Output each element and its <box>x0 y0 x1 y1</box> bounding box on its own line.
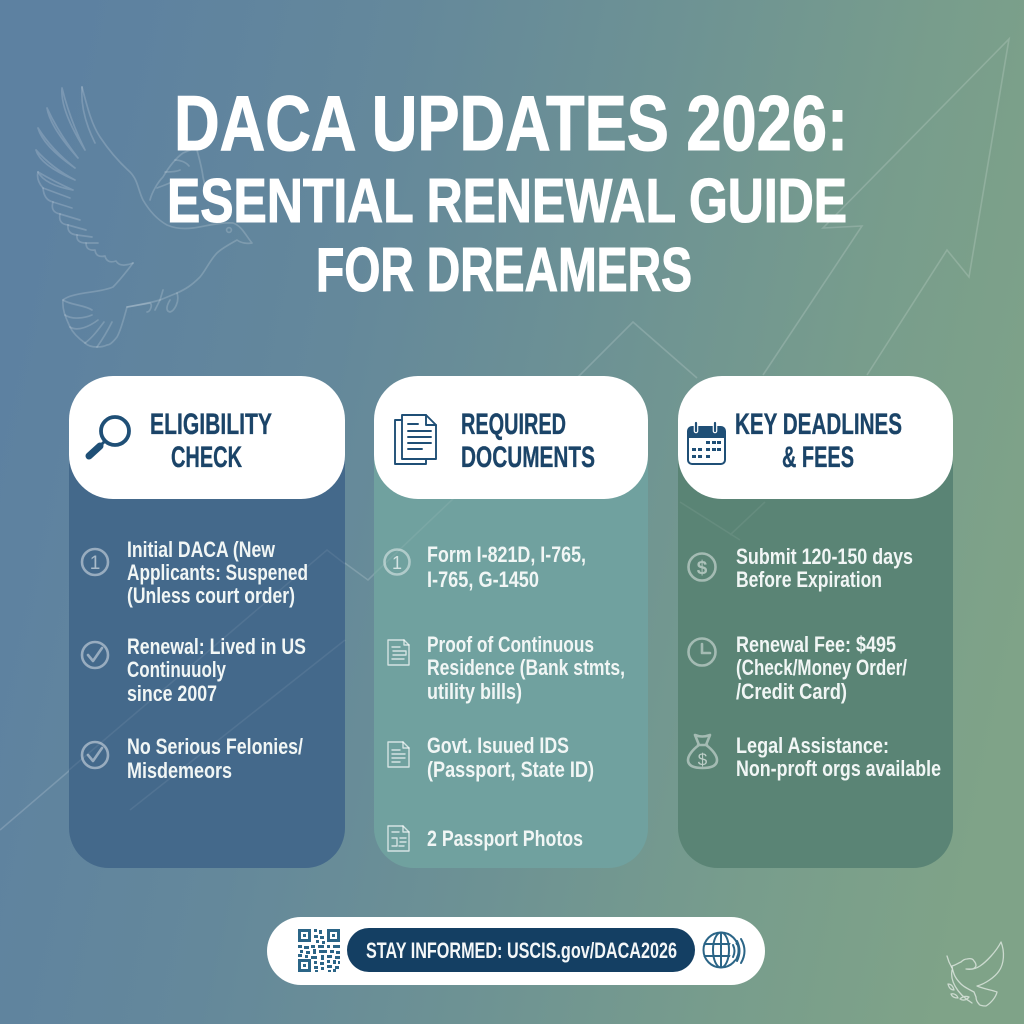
text: renewal requirement: Continuuoly <box>127 657 226 682</box>
text: government IDs: (Passport, State ID) <box>427 757 594 782</box>
footer call to action <box>267 917 765 985</box>
icon: check circle <box>82 642 108 668</box>
heading: required documents: DOCUMENTS <box>461 441 595 474</box>
text: proof of residence: Proof of Continuous <box>427 632 594 657</box>
panel: eligibility check <box>69 376 345 868</box>
text: government IDs: Govt. Isuued IDS <box>427 733 569 758</box>
footer pill <box>267 917 765 985</box>
icon: money bag: $ <box>698 750 708 769</box>
heading: required documents <box>461 408 595 474</box>
background dove outline <box>36 87 252 347</box>
icon: documents <box>395 415 436 464</box>
icon: QR code <box>298 929 340 972</box>
title: FOR DREAMERS <box>316 236 692 305</box>
panel header <box>374 376 648 499</box>
icon: dollar circle <box>688 554 716 580</box>
icon: clock <box>688 638 716 666</box>
panel body <box>374 420 648 868</box>
icon: photo document <box>388 826 409 851</box>
icon: ID document <box>388 742 409 767</box>
title: DACA UPDATES 2026: <box>174 79 848 167</box>
icon: number one <box>82 549 108 575</box>
text: renewal requirement: Renewal: Lived in US <box>127 634 306 659</box>
text: submit window: Before Expiration <box>736 567 882 592</box>
text: forms: Form I-821D, I-765, <box>427 542 586 567</box>
text: passport photos: 2 Passport Photos <box>427 826 583 851</box>
icon: money bag <box>688 735 717 769</box>
panel header <box>678 376 953 499</box>
icon: number one: 1 <box>90 553 100 574</box>
text: initial DACA: Applicants: Suspened <box>127 560 308 585</box>
heading: eligibility check: CHECK <box>171 441 242 474</box>
text: forms <box>427 542 586 592</box>
text: no serious felonies <box>127 734 304 783</box>
text: legal assistance: Non-proft orgs available <box>736 756 941 781</box>
text: renewal fee: (Check/Money Order/ <box>736 655 908 680</box>
icon: number one: 1 <box>392 553 402 573</box>
icon: number one <box>384 550 410 574</box>
text: initial DACA: Initial DACA (New <box>127 537 275 562</box>
icon: magnifying glass <box>89 417 129 456</box>
panel body <box>678 420 953 868</box>
text: renewal fee: /Credit Card) <box>736 679 847 704</box>
text: submit window <box>736 544 913 592</box>
heading: required documents: REQUIRED <box>461 408 566 441</box>
text: forms: I-765, G-1450 <box>427 567 539 592</box>
text: renewal requirement <box>127 634 306 706</box>
text: submit window: Submit 120-150 days <box>736 544 913 569</box>
text: initial DACA <box>127 537 308 608</box>
text: legal assistance: Legal Assistance: <box>736 733 889 758</box>
text: renewal fee <box>736 632 908 704</box>
text: no serious felonies: Misdemeors <box>127 758 232 783</box>
text: proof of residence: Residence (Bank stmts, <box>427 655 625 680</box>
text: renewal fee: Renewal Fee: $495 <box>736 632 896 657</box>
icon: dollar circle: $ <box>697 558 708 579</box>
text: renewal requirement: since 2007 <box>127 681 217 706</box>
text: legal assistance <box>736 733 941 781</box>
logo: small dove with olive branch <box>947 942 1003 1006</box>
text: initial DACA: (Unless court order) <box>127 583 295 608</box>
heading: key deadlines and fees: & FEES <box>782 441 854 474</box>
icon: calendar <box>688 423 725 464</box>
title <box>167 79 848 305</box>
heading: eligibility check: ELIGIBILITY <box>150 408 272 441</box>
panel: required documents <box>374 376 648 868</box>
heading: key deadlines and fees <box>735 408 902 474</box>
panel header <box>69 376 345 499</box>
background rising arrow chart <box>0 39 1009 830</box>
text: government IDs <box>427 733 594 782</box>
heading: eligibility check <box>150 408 272 474</box>
button: stay informed: STAY INFORMED: USCIS.gov/DACA2026 <box>366 938 677 963</box>
text: proof of residence <box>427 632 625 704</box>
heading: key deadlines and fees: KEY DEADLINES <box>735 408 902 441</box>
panel body <box>69 420 345 868</box>
button: stay informed <box>347 928 695 972</box>
icon: globe with signal <box>704 932 744 968</box>
text: no serious felonies: No Serious Felonies/ <box>127 734 304 759</box>
title: ESENTIAL RENEWAL GUIDE <box>167 167 847 236</box>
text: proof of residence: utility bills) <box>427 679 522 704</box>
icon: residence document <box>388 640 409 665</box>
panel: key deadlines and fees <box>678 376 953 868</box>
icon: check circle <box>82 742 108 768</box>
